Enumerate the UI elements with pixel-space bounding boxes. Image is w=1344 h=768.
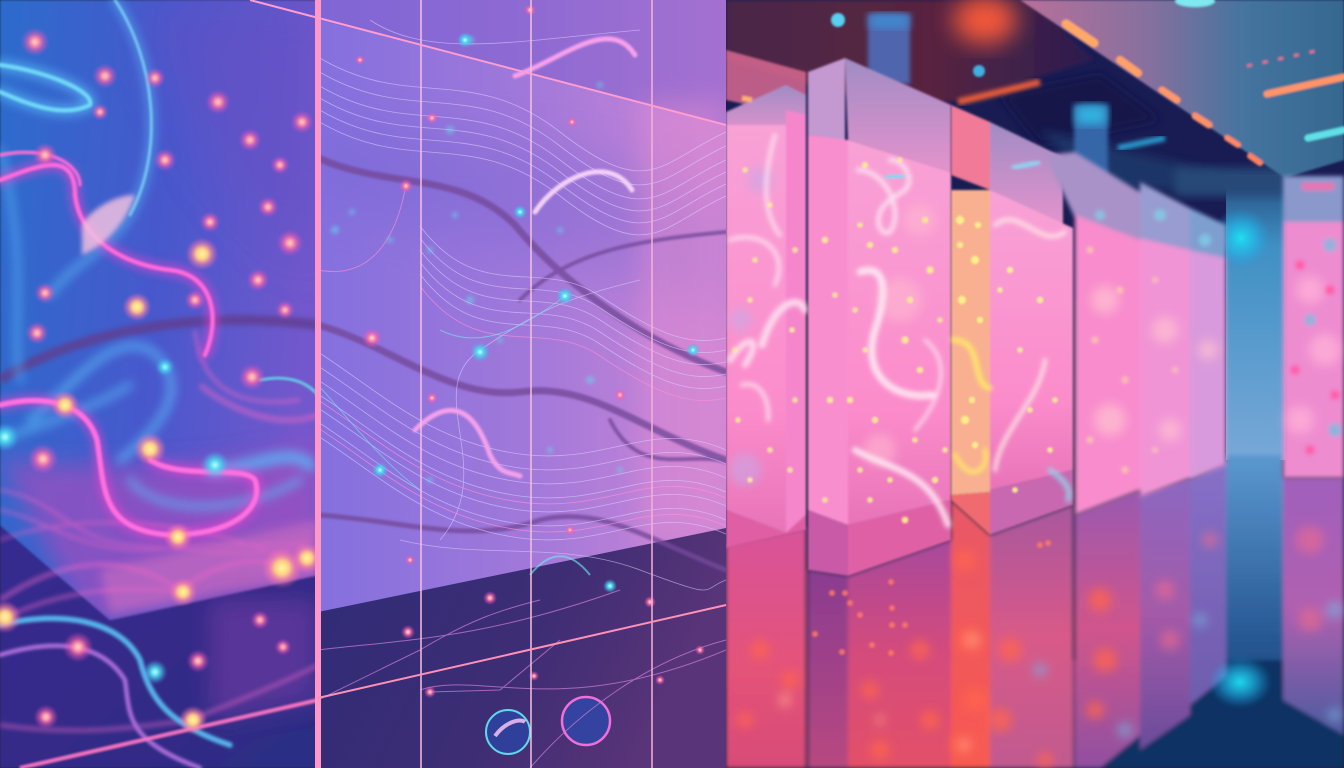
floor area of left panel	[0, 525, 318, 768]
floor area of mid panel	[318, 528, 726, 768]
teal floor glow	[1210, 658, 1270, 707]
far right pink block	[1283, 176, 1344, 478]
glass block A	[726, 50, 806, 548]
glass block C	[951, 105, 1073, 535]
ceiling and back wall	[726, 0, 1344, 460]
glass panel frame lines	[250, 0, 726, 768]
fine fibre bundles	[318, 20, 726, 590]
left glow nodes	[0, 28, 322, 734]
floor channel and reflections	[726, 455, 1344, 768]
dark mauve band	[0, 320, 318, 380]
floor fibre lines	[318, 590, 726, 768]
soft cyan bokeh dots	[331, 36, 623, 483]
pink glowing curves	[0, 152, 257, 535]
glow nodes	[355, 4, 705, 698]
thick mauve wave bands	[318, 158, 726, 570]
glass blocks D, E and F	[1045, 152, 1226, 515]
reflected sparks	[812, 540, 1051, 656]
glass block B	[808, 58, 951, 576]
pink fibre bundles	[0, 330, 318, 730]
bubble circles	[486, 697, 610, 754]
blue glowing curves	[0, 0, 318, 768]
mid glass panel	[318, 0, 726, 768]
diagonal pink beam	[20, 700, 318, 768]
ceiling light panel with orange strips	[1020, 0, 1344, 178]
bright ribbons	[415, 39, 635, 476]
left neural panel	[0, 0, 322, 768]
reflected glows	[737, 526, 1344, 768]
